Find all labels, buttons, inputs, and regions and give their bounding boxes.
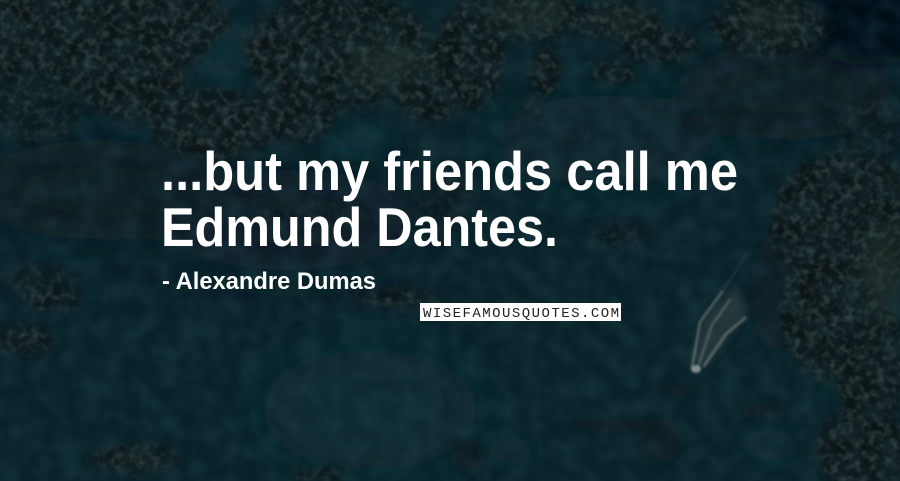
quote text [161,140,738,258]
shallow water patches [110,20,857,462]
watermark badge: WISEFAMOUSQUOTES.COM [423,306,619,322]
quote line 2: Edmund Dantes. [161,196,558,258]
quote line 1: ...but my friends call me [161,140,738,202]
sea shadows [452,114,797,471]
corner shadow [800,0,900,65]
author: - Alexandre Dumas [162,268,376,295]
icon: boat wake [690,254,746,373]
